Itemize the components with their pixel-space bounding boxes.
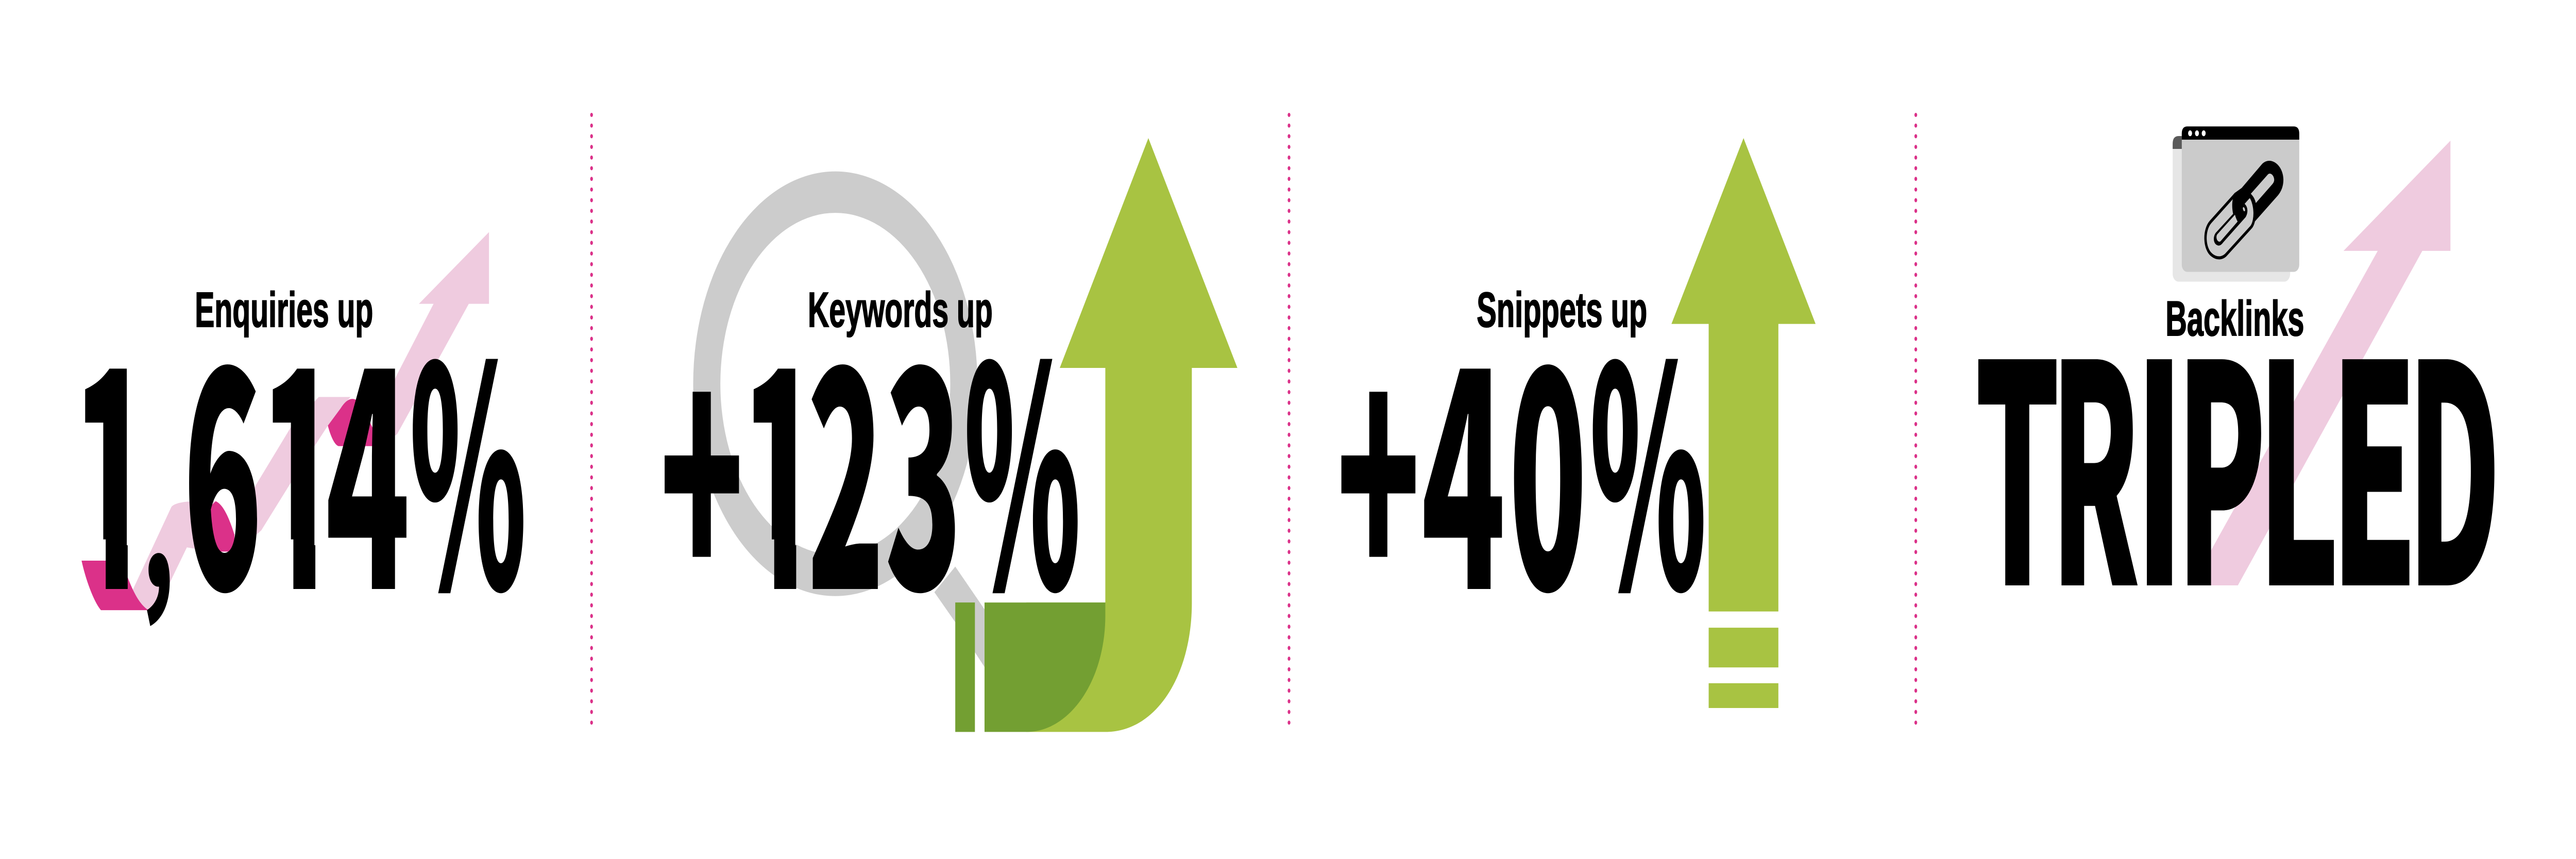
icon: pink rising arrow bbox=[2211, 141, 2450, 585]
big number: +40%: + bbox=[1336, 237, 1421, 677]
big number: 1,614%: 1 bbox=[72, 237, 152, 677]
big number: 1,614%: 4 bbox=[325, 237, 410, 677]
panel: backlinks bbox=[1974, 126, 2501, 673]
panel: snippets bbox=[1336, 138, 1816, 708]
icon: pink rising ribbon arrow bbox=[81, 232, 489, 610]
big number: +40% bbox=[1336, 237, 1707, 677]
big number: +123% bbox=[659, 237, 1081, 677]
icon: green up arrow with dashes bbox=[1671, 138, 1816, 708]
big word: TRIPLED: T bbox=[1974, 233, 2060, 673]
heading: Snippets up: Snippets up bbox=[1477, 282, 1647, 338]
big word: TRIPLED: R bbox=[2050, 233, 2140, 673]
big word: TRIPLED bbox=[1974, 233, 2501, 673]
big number: +40%: 4 bbox=[1421, 237, 1505, 677]
icon: browser window with chain link bbox=[2173, 126, 2299, 281]
big number: 1,614%: 1 bbox=[260, 237, 340, 677]
big number: 1,614%: 6 bbox=[183, 237, 262, 677]
big word: TRIPLED: E bbox=[2330, 233, 2418, 673]
heading: Backlinks: Backlinks bbox=[2165, 291, 2304, 346]
big word: TRIPLED: L bbox=[2257, 233, 2340, 673]
big number: +123%: 3 bbox=[885, 237, 962, 677]
big number: 1,614%: , bbox=[142, 392, 174, 636]
heading: Keywords up: Keywords up bbox=[808, 282, 993, 338]
heading: Enquiries up: Enquiries up bbox=[195, 282, 373, 338]
big number: +123%: % bbox=[964, 237, 1081, 677]
big number: +40%: 0 bbox=[1509, 237, 1587, 677]
big number: +123%: 1 bbox=[740, 237, 821, 677]
big number: 1,614% bbox=[85, 237, 527, 677]
icon: magnifier and green curved arrow bbox=[693, 138, 1238, 732]
panel: enquiries bbox=[81, 232, 527, 677]
big number: 1,614%: % bbox=[410, 237, 527, 677]
big word: TRIPLED: I bbox=[2135, 233, 2184, 673]
big number: +40%: % bbox=[1589, 237, 1707, 677]
big number: +123%: 2 bbox=[807, 237, 884, 677]
big number: +123%: + bbox=[659, 237, 744, 677]
big word: TRIPLED: D bbox=[2408, 233, 2501, 673]
panel: keywords bbox=[659, 138, 1238, 732]
big word: TRIPLED: P bbox=[2176, 233, 2266, 673]
